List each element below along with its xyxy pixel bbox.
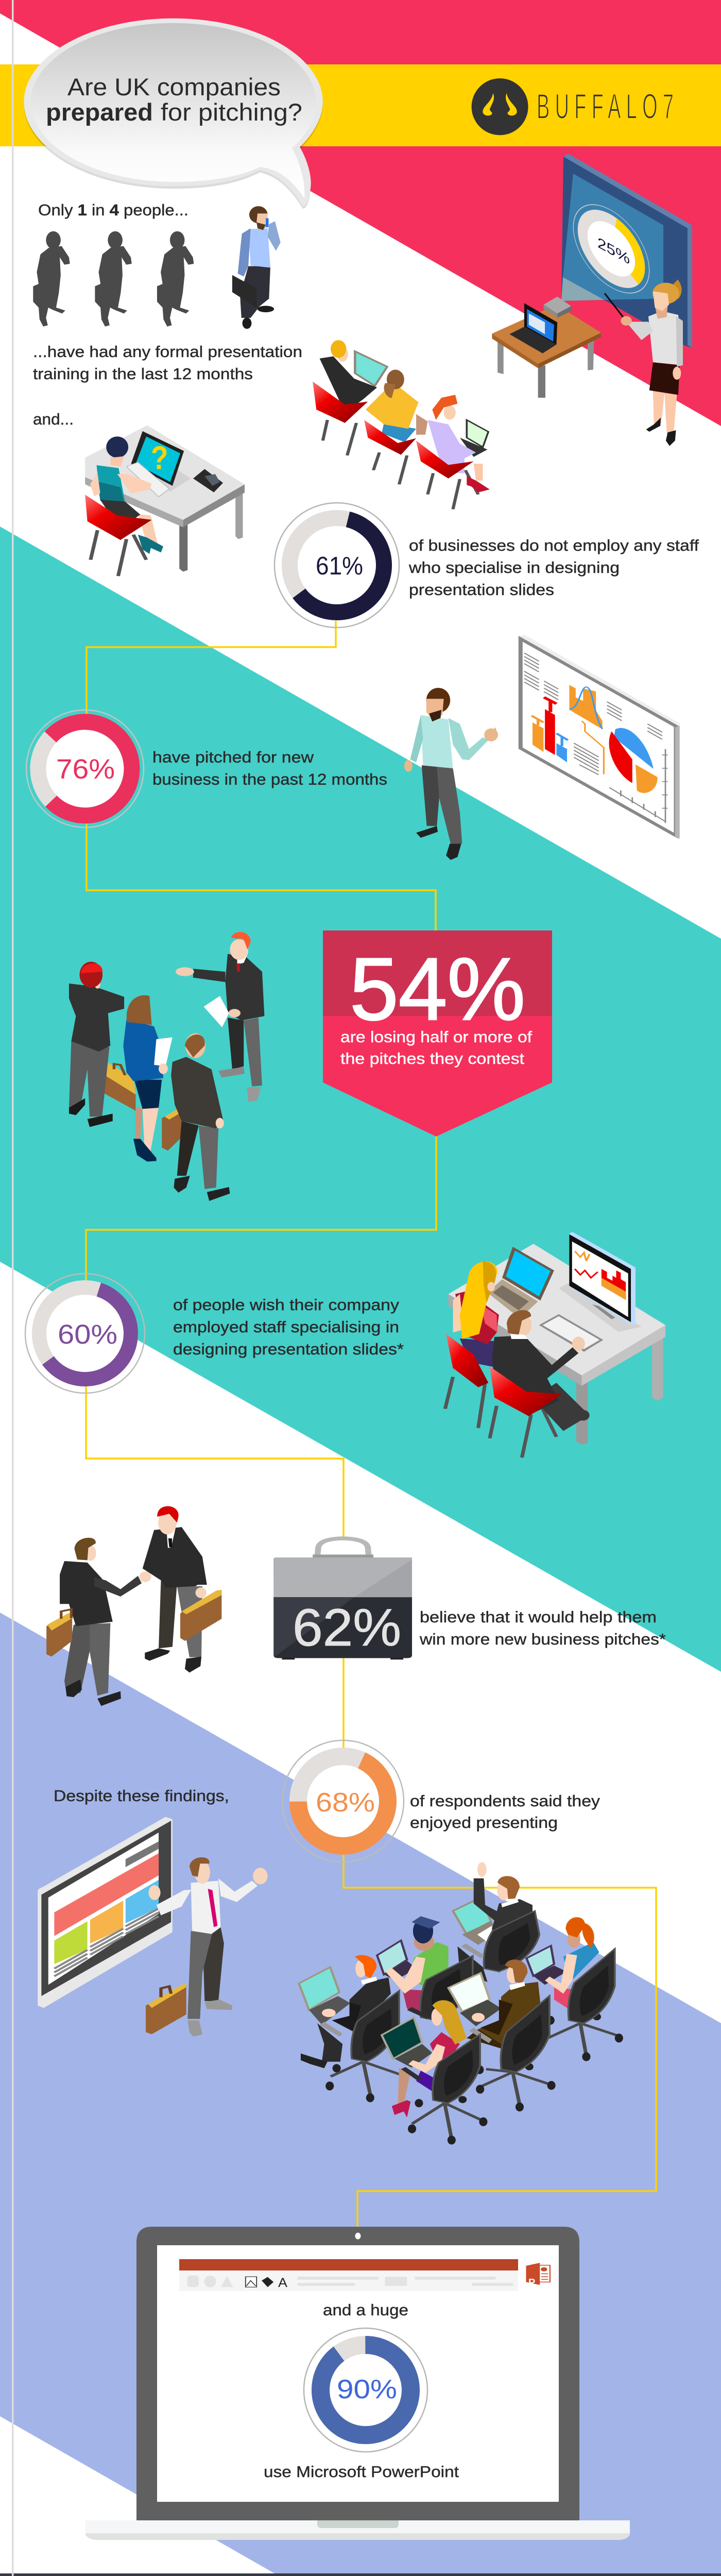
banner caption: are losing half or more of bbox=[340, 1028, 532, 1046]
text: 60 percent caption: of people wish their company bbox=[173, 1296, 400, 1314]
icon: powerpoint logo: P bbox=[528, 2277, 535, 2289]
text: and: and... bbox=[33, 410, 74, 428]
chair bbox=[401, 2034, 487, 2145]
laptop screen bbox=[157, 2245, 559, 2502]
chair bbox=[469, 1996, 556, 2111]
banner caption: the pitches they contest bbox=[340, 1049, 524, 1067]
chair bbox=[407, 1956, 473, 2020]
logo mark bbox=[472, 78, 528, 135]
illustration: four colleagues talking bbox=[69, 932, 264, 1201]
attendee: man with orange hair bbox=[299, 1955, 391, 2068]
bubble shape bbox=[24, 19, 323, 209]
chair bbox=[320, 1991, 400, 2102]
background: blue band bbox=[0, 1613, 721, 2573]
icon: briefcase with 62 percent bbox=[273, 1538, 412, 1659]
text: despite these findings: Despite these findings, bbox=[54, 1787, 229, 1805]
illustration: woman at desk with computer bbox=[85, 425, 245, 576]
banner upper shape bbox=[323, 930, 552, 1016]
text: 62 percent caption: believe that it would help them bbox=[420, 1608, 657, 1626]
text: 60 percent caption: employed staff specialising in bbox=[173, 1318, 399, 1336]
donut: 25 percent bbox=[571, 184, 652, 313]
man pointing bbox=[176, 932, 264, 1102]
chair bbox=[461, 1911, 539, 1972]
header yellow band bbox=[0, 64, 721, 146]
background: pink band bbox=[0, 0, 721, 426]
person two bbox=[364, 370, 427, 484]
survey note band background bbox=[0, 2573, 721, 2576]
text: use Microsoft PowerPoint: use Microsoft PowerPoint bbox=[264, 2463, 459, 2481]
figure: woman presenter with pointer bbox=[605, 279, 683, 446]
attendee: man raising hand bbox=[453, 1862, 533, 1982]
briefcase bbox=[104, 1063, 135, 1111]
text: 62 percent caption: win more new business pitches* bbox=[419, 1630, 666, 1648]
illustration: two businessmen shaking hands bbox=[46, 1506, 221, 1706]
title text: prepared bbox=[46, 98, 153, 126]
text: 68 percent caption bbox=[410, 1792, 600, 1832]
person three bbox=[416, 395, 490, 509]
text: only 1 in 4: Only 1 in 4 people... bbox=[38, 201, 188, 219]
figure: man gesturing at whiteboard bbox=[404, 688, 498, 860]
donut: 61 percent bbox=[274, 503, 399, 628]
donut: 76 percent: 76% bbox=[56, 754, 115, 785]
donut: 60 percent: 60% bbox=[58, 1319, 117, 1350]
text: 68 percent caption: enjoyed presenting bbox=[410, 1814, 558, 1832]
illustration: table with laptop and projector bbox=[492, 297, 601, 398]
laptop camera bbox=[355, 2233, 360, 2239]
man in brown jacket bbox=[162, 1033, 230, 1201]
donut: 61 percent: 61% bbox=[316, 552, 363, 580]
man with red hair bbox=[69, 962, 124, 1127]
banner caption bbox=[340, 1028, 532, 1067]
text: 61 percent caption: presentation slides bbox=[409, 581, 554, 599]
text: 60 percent caption bbox=[173, 1296, 404, 1358]
illustration: laptop showing PowerPoint bbox=[85, 2227, 630, 2540]
title text bbox=[46, 73, 302, 126]
man on right bbox=[143, 1506, 221, 1672]
text: 76 percent caption: business in the past 12 months bbox=[152, 770, 387, 788]
banner figure: 54% bbox=[350, 940, 525, 1039]
title text: Are UK companies bbox=[67, 73, 281, 100]
header logo bbox=[472, 78, 679, 135]
powerpoint ribbon bbox=[179, 2259, 518, 2291]
text: formal presentation training: ...have had any formal presentation bbox=[33, 343, 302, 361]
powerpoint ribbon: A bbox=[278, 2276, 287, 2290]
laptop base bbox=[85, 2520, 630, 2540]
illustration: presentation screen with 25% chart bbox=[561, 154, 692, 348]
briefcase body bbox=[273, 1538, 412, 1659]
briefcase figure: 62% bbox=[293, 1598, 401, 1657]
background: teal band bbox=[0, 527, 721, 1672]
text: 61 percent caption: who specialise in designing bbox=[408, 558, 620, 577]
text: 68 percent caption: of respondents said they bbox=[410, 1792, 600, 1810]
figure: man at desk with keyboard bbox=[490, 1310, 590, 1458]
donut: 90 percent: 90% bbox=[337, 2375, 397, 2404]
woman in blue bbox=[123, 995, 173, 1162]
text: 76 percent caption: have pitched for new bbox=[152, 748, 314, 766]
attendee: woman with red hair bbox=[526, 1917, 599, 2010]
attendee: man in brown jacket bbox=[449, 1959, 540, 2050]
donut: 68 percent: 68% bbox=[316, 1788, 375, 1818]
text: 60 percent caption: designing presentation slides* bbox=[173, 1340, 404, 1358]
icon: three grey silhouettes bbox=[33, 231, 194, 327]
vertical margin line bbox=[12, 0, 13, 2576]
donut: 90 percent bbox=[304, 2328, 427, 2452]
text: 76 percent caption bbox=[152, 748, 387, 788]
projected light bbox=[561, 174, 663, 301]
connector lines bbox=[86, 621, 656, 2228]
attendee: woman in green top bbox=[377, 1916, 449, 2014]
title text: for pitching? bbox=[161, 98, 302, 126]
illustration: wall screen with colour slide bbox=[38, 1817, 173, 2008]
icon: powerpoint logo bbox=[526, 2263, 550, 2289]
attendee: blonde woman bbox=[382, 2000, 467, 2117]
illustration: three seated people with laptops bbox=[313, 340, 490, 509]
figure: man presenting with briefcase bbox=[146, 1857, 268, 2037]
figure: man on phone bbox=[232, 206, 281, 329]
laptop lid bbox=[136, 2227, 579, 2520]
donut: 68 percent bbox=[282, 1740, 404, 1862]
donut: 25 percent: 25% bbox=[597, 234, 630, 268]
banner lower arrow bbox=[323, 1016, 552, 1137]
logo wordmark: BUFFALO7 bbox=[537, 87, 679, 126]
text: 61 percent caption bbox=[408, 536, 699, 599]
illustration: two people at desk with computers bbox=[449, 1232, 665, 1445]
person one bbox=[313, 340, 387, 455]
figure: blonde woman at desk bbox=[445, 1262, 499, 1428]
text: 62 percent caption bbox=[419, 1608, 666, 1648]
text: 61 percent caption: of businesses do not employ any staff bbox=[409, 536, 699, 554]
text: and a huge: and a huge bbox=[323, 2301, 408, 2319]
illustration: woman at desk with computer: ? bbox=[151, 439, 168, 476]
illustration: audience with laptops in office chairs bbox=[299, 1862, 623, 2145]
donut: 60 percent bbox=[25, 1274, 145, 1393]
man on left bbox=[46, 1538, 151, 1706]
text: formal presentation training bbox=[33, 343, 302, 383]
speech bubble with title bbox=[24, 19, 323, 209]
chair bbox=[546, 1949, 623, 2061]
illustration: whiteboard with charts bbox=[519, 635, 680, 839]
screen frame bbox=[561, 157, 692, 348]
banner: 54 percent bbox=[323, 930, 552, 1137]
donut: 76 percent bbox=[19, 702, 151, 835]
text: formal presentation training: training in the last 12 months bbox=[33, 365, 253, 383]
